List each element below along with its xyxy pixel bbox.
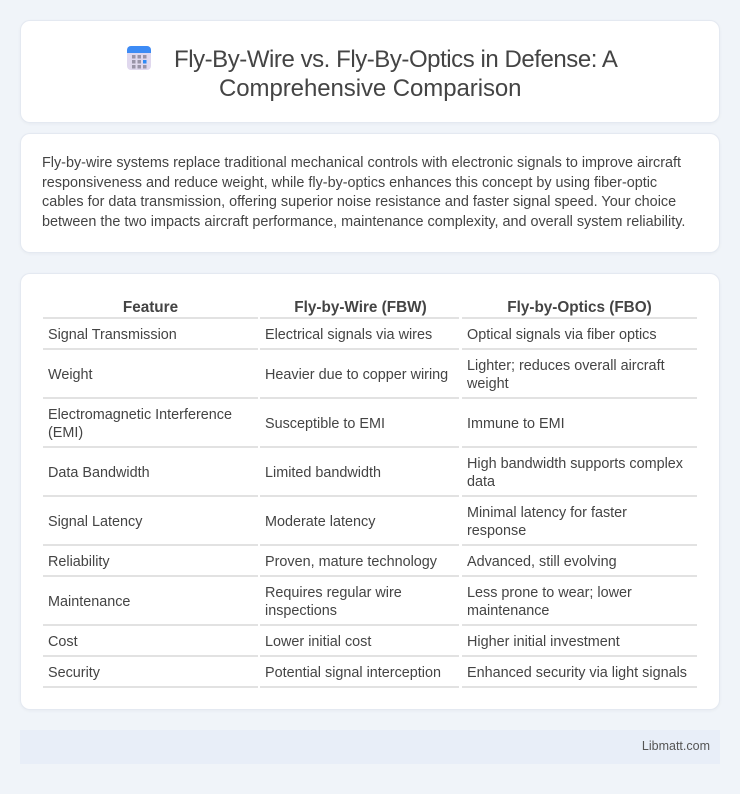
table header: Feature (123, 299, 178, 316)
row: weight: Weight (48, 367, 93, 383)
comparison table: Limited bandwidth (265, 465, 381, 481)
comparison table: Minimal latency for faster (467, 505, 627, 521)
intro paragraph: Fly-by-wire systems replace traditional mechanical controls with electronic signals to improve aircraft (42, 155, 681, 171)
row: EMI: Electromagnetic Interference (48, 407, 232, 423)
panel: intro text card (20, 133, 720, 253)
comparison table: inspections (265, 603, 337, 619)
comparison table: Proven, mature technology (265, 554, 437, 570)
comparison table: Immune to EMI (467, 416, 565, 432)
intro paragraph: cables for data transmission, offering superior noise resistance and faster signal speed. Your choice (42, 194, 676, 210)
panel: title card (20, 20, 720, 123)
comparison table: Advanced, still evolving (467, 554, 617, 570)
comparison table: Heavier due to copper wiring (265, 367, 448, 383)
row: security: Security (48, 665, 100, 681)
comparison table: Less prone to wear; lower (467, 585, 632, 601)
comparison table: maintenance (467, 603, 549, 619)
table header: Fly-by-Wire (FBW) (294, 299, 427, 316)
row: data bandwidth: Data Bandwidth (48, 465, 150, 481)
comparison table: Higher initial investment (467, 634, 620, 650)
row: EMI (48, 407, 232, 441)
intro paragraph: responsiveness and reduce weight, while fly-by-optics enhances this concept by using fiber-optic (42, 174, 657, 190)
comparison table: Electrical signals via wires (265, 327, 432, 343)
title: Fly-By-Wire vs. Fly-By-Optics in Defense: A (174, 46, 617, 73)
comparison table: Lighter; reduces overall aircraft (467, 358, 665, 374)
intro paragraph: between the two impacts aircraft performance, maintenance complexity, and overall system reliability. (42, 214, 685, 230)
comparison table: response (467, 523, 526, 539)
comparison table: Susceptible to EMI (265, 416, 385, 432)
comparison table: weight (467, 376, 509, 392)
table header (123, 299, 652, 316)
comparison table: data (467, 474, 495, 490)
title (174, 46, 618, 102)
title: Comprehensive Comparison (219, 75, 521, 102)
table header: Fly-by-Optics (FBO) (507, 299, 652, 316)
row: maintenance: Maintenance (48, 594, 130, 610)
row: reliability: Reliability (48, 554, 110, 570)
row: signal transmission: Signal Transmission (48, 327, 177, 343)
comparison table: Enhanced security via light signals (467, 665, 687, 681)
comparison table: High bandwidth supports complex (467, 456, 683, 472)
comparison table: Potential signal interception (265, 665, 441, 681)
intro paragraph (42, 155, 685, 230)
comparison table: Lower initial cost (265, 634, 371, 650)
comparison table: Moderate latency (265, 514, 375, 530)
comparison table: Optical signals via fiber optics (467, 327, 657, 343)
row: signal latency: Signal Latency (48, 514, 142, 530)
comparison table: Requires regular wire (265, 585, 402, 601)
icon: calendar grid (127, 46, 151, 70)
row: cost: Cost (48, 634, 78, 650)
row: EMI: (EMI) (48, 425, 83, 441)
footer bar (20, 730, 720, 764)
panel: comparison table card (20, 273, 720, 710)
footer credit: Libmatt.com (642, 739, 710, 753)
